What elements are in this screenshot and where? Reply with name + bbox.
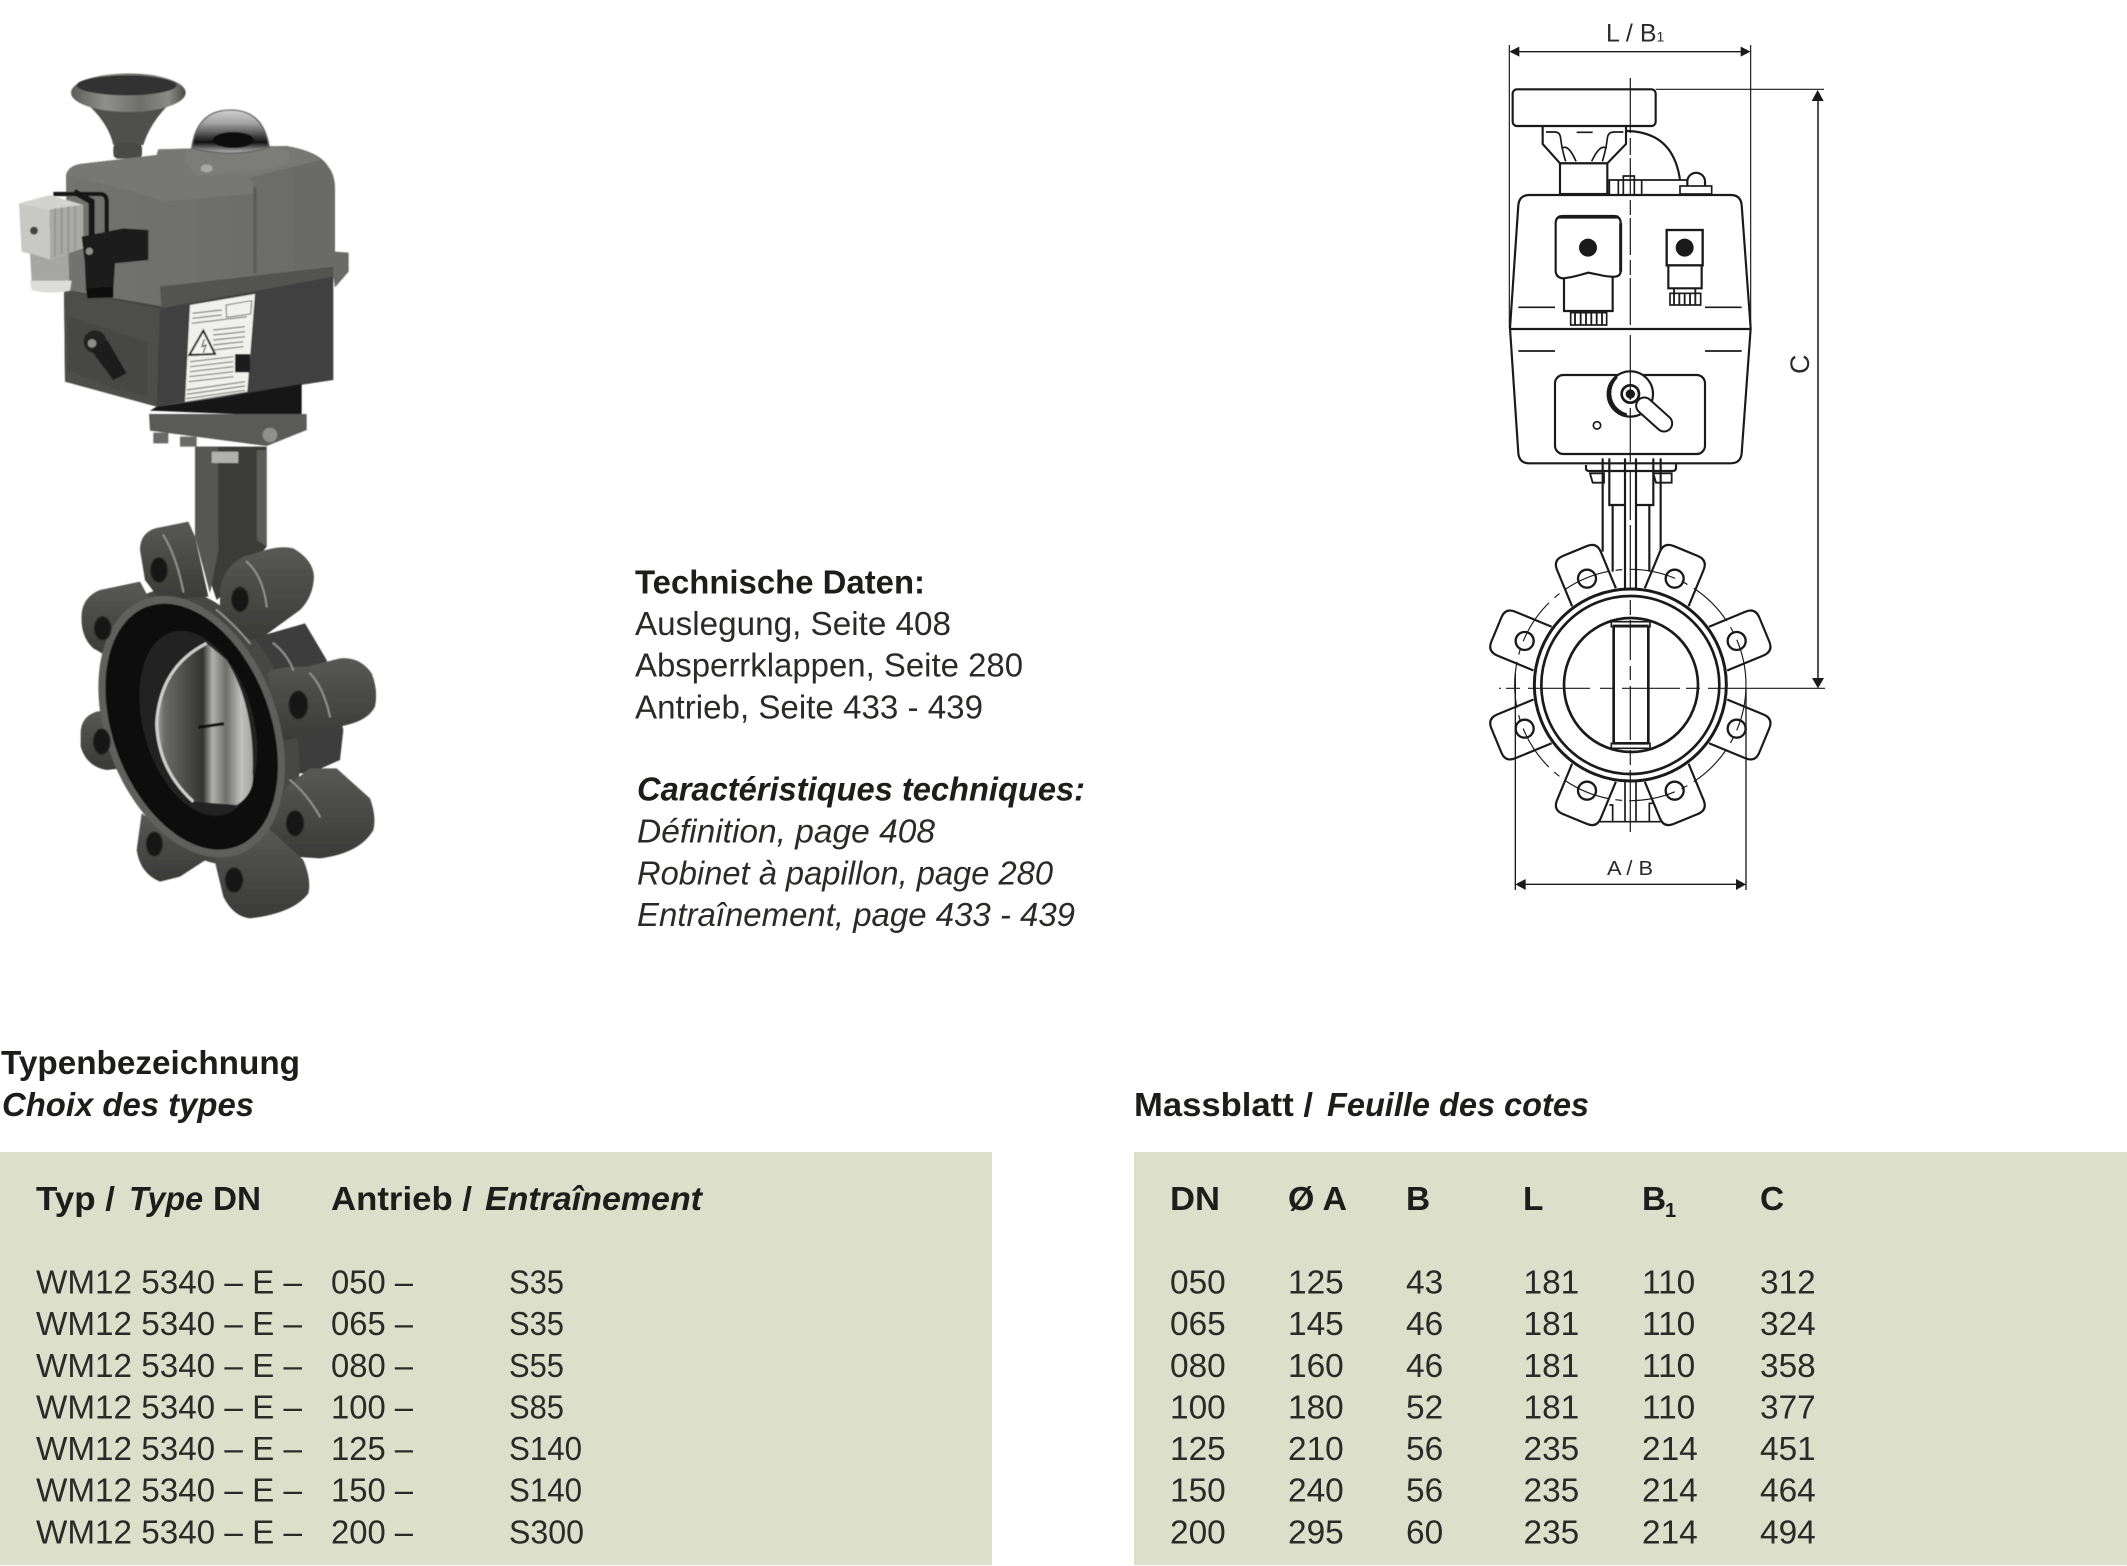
table rows: 494 [1760,1514,1816,1551]
table header: 1 [1665,1200,1676,1222]
table rows: 312 [1760,1264,1816,1302]
table rows: 110 [1642,1306,1695,1343]
table rows: 181 [1524,1348,1579,1385]
table rows: 100 [1170,1389,1226,1426]
table rows: 150 – [331,1473,413,1510]
table rows: 181 [1524,1264,1579,1302]
technical data text: German: Absperrklappen, Seite 280 [635,648,1023,685]
table rows: 295 [1288,1514,1344,1551]
table header: Entraînement [485,1181,704,1218]
table rows: 358 [1760,1348,1816,1385]
table rows: 160 [1288,1348,1344,1385]
table rows: 080 [1170,1348,1226,1385]
table rows: S140 [509,1431,582,1468]
dimension: C [1656,89,1824,688]
position indicator [1609,131,1712,194]
table rows: 145 [1288,1306,1344,1343]
table header: Type [129,1181,203,1218]
handwheel [1513,89,1656,126]
threaded holes [93,558,308,892]
product photo: butterfly valve with electric actuator [19,73,376,918]
table rows: 125 [1170,1431,1226,1468]
lower gearbox [64,273,333,407]
technical data text: French [637,772,1085,934]
rear body [64,560,343,893]
table rows: WM12 5340 – E – [36,1473,302,1510]
table rows: 451 [1760,1431,1816,1468]
table rows [1170,1264,1816,1551]
table rows: 56 [1406,1473,1443,1510]
valve disc [1611,622,1650,748]
black connector [82,228,148,298]
icon: handwheel [71,73,186,159]
heading: Typenbezeichnung / Choix des types: Choix des types [2,1087,254,1124]
table rows: 100 – [331,1389,413,1426]
table rows: 200 [1170,1514,1226,1551]
table rows: 60 [1406,1514,1443,1551]
table rows: 125 – [331,1431,413,1468]
bolt holes [1516,570,1746,800]
table rows: 235 [1524,1514,1579,1551]
table rows: WM12 5340 – E – [36,1389,302,1426]
table rows: 150 [1170,1473,1226,1510]
table rows: 240 [1288,1473,1344,1510]
table rows: S140 [509,1473,582,1510]
table rows: 464 [1760,1473,1816,1510]
table header: DN [1170,1181,1220,1218]
table rows: 110 [1642,1264,1695,1302]
dimension: A / B [1515,673,1746,890]
table rows: 46 [1406,1306,1443,1343]
flange rings [1534,589,1726,781]
table rows: S35 [509,1306,564,1343]
table header: Antrieb / [331,1181,472,1218]
table rows: 214 [1642,1514,1698,1551]
black clamp [53,192,107,237]
panel: dimensions table [1134,1152,2127,1565]
table header: Typ / [36,1181,115,1218]
table rows: 181 [1524,1389,1579,1426]
neck [195,447,267,600]
heading: Typenbezeichnung / Choix des types: Typenbezeichnung [1,1045,300,1082]
butterfly disc [157,643,253,805]
table rows: 065 [1170,1306,1226,1343]
table rows: S35 [509,1264,564,1302]
stem [1600,458,1661,822]
table rows: 125 [1288,1264,1344,1302]
actuator photo [19,73,349,447]
table rows: S55 [509,1348,564,1385]
technical data text: German [635,564,1023,726]
table rows: WM12 5340 – E – [36,1431,302,1468]
gasket ring [64,569,320,884]
table rows: S300 [509,1514,584,1551]
table rows: 377 [1760,1389,1816,1426]
table rows: 46 [1406,1348,1443,1385]
technical data text: French: Entraînement, page 433 - 439 [637,897,1075,934]
table header: B [1406,1181,1430,1218]
small connector [1667,230,1703,305]
table rows: WM12 5340 – E – [36,1348,302,1385]
mounting flange [1586,464,1676,483]
table rows: 050 [1170,1264,1226,1302]
table rows: 52 [1406,1389,1443,1426]
table header: C [1760,1181,1784,1218]
table rows: 214 [1642,1473,1698,1510]
table rows: 56 [1406,1431,1443,1468]
table header: B [1642,1181,1666,1218]
table header [36,1181,704,1218]
table rows: 214 [1642,1431,1698,1468]
top cover [66,146,349,308]
table rows [36,1264,584,1551]
table rows: 43 [1406,1264,1443,1302]
table rows: 210 [1288,1431,1344,1468]
large connector [1556,216,1621,325]
mounting bracket [149,384,307,447]
handwheel neck [1543,127,1626,194]
warning label [185,294,255,402]
dome indicator [185,110,290,175]
table rows: WM12 5340 – E – [36,1514,302,1551]
heading: Massblatt / Feuille des cotes: Massblatt / [1134,1087,1313,1124]
actuator housing [1509,195,1751,463]
bolt circle [1515,569,1746,801]
table rows: 235 [1524,1431,1579,1468]
table header: Ø A [1288,1181,1347,1218]
technical data text: French: Caractéristiques techniques: [637,772,1085,809]
table rows: 110 [1642,1348,1695,1385]
dimension label: C: C [1785,354,1815,374]
table rows: 200 – [331,1514,413,1551]
technical data text: French: Définition, page 408 [637,814,935,851]
lugs [81,522,376,918]
centre lines [1499,78,1825,832]
table rows: 235 [1524,1473,1579,1510]
valve body photo [64,447,376,918]
light grey connector [19,195,83,293]
table rows: 110 [1642,1389,1695,1426]
table rows: 181 [1524,1306,1579,1343]
panel: type designation table [0,1152,992,1565]
lug highlights [163,535,330,817]
table rows: 180 [1288,1389,1344,1426]
table header: L [1523,1181,1543,1218]
technical data text: German: Technische Daten: [635,564,925,602]
dimension label: A / B: A / B [1607,858,1653,880]
table rows: 080 – [331,1348,413,1385]
table rows: WM12 5340 – E – [36,1306,302,1343]
table rows: 324 [1760,1306,1816,1343]
technical data text: German: Antrieb, Seite 433 - 439 [635,689,983,726]
valve stem and flange [1487,458,1773,828]
heading: Typenbezeichnung / Choix des types [1,1045,300,1124]
table rows: S85 [509,1389,564,1426]
dimension drawing [1487,45,1825,890]
heading: Massblatt / Feuille des cotes: Feuille des cotes [1327,1087,1589,1124]
lugs [1487,542,1773,828]
technical data text: French: Robinet à papillon, page 280 [637,855,1053,892]
heading: Massblatt / Feuille des cotes [1134,1087,1589,1124]
actuator outline [1509,89,1751,483]
technical data text: German: Auslegung, Seite 408 [635,606,951,643]
manual lever plate [1555,371,1705,454]
table rows: 065 – [331,1306,413,1343]
table rows: WM12 5340 – E – [36,1264,302,1302]
dimension label: L / B1: L / B1 [1606,20,1664,48]
manual lever [84,330,127,380]
dimension: L / B1 [1509,45,1751,328]
table header: DN [213,1181,261,1218]
table header [1170,1181,1784,1222]
table rows: 050 – [331,1264,413,1302]
